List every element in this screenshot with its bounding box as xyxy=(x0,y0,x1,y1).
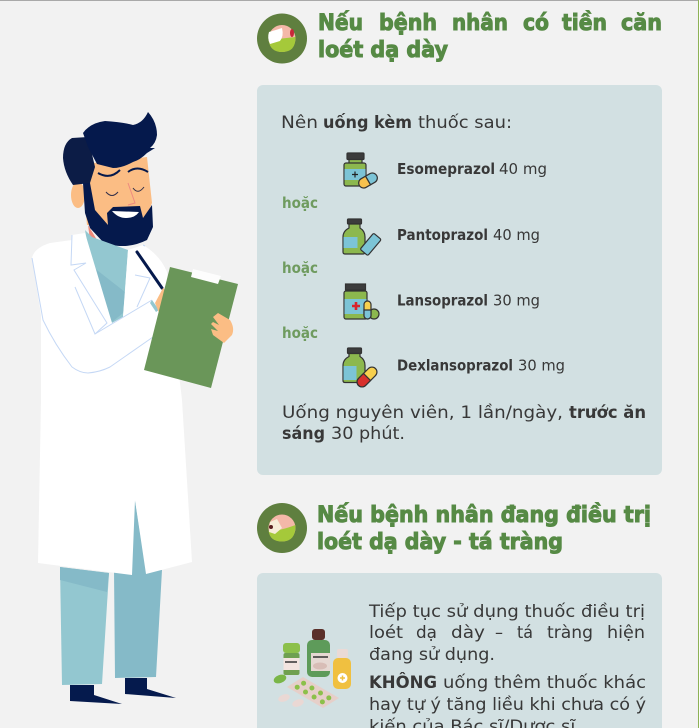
section 1 heading: bệnh xyxy=(379,11,437,36)
section 2 icon: treatment badge xyxy=(257,503,307,553)
illustration: medicine bottles and blister pack xyxy=(273,629,351,708)
drug: lansoprazol: Lansoprazol xyxy=(397,292,488,310)
illustration: doctor writing on clipboard xyxy=(32,112,238,704)
drug: pantoprazol: 40 mg xyxy=(493,226,540,244)
treatment text: hay tự ý tăng liều khi chưa có ý xyxy=(369,695,646,714)
treatment text: đang sử dụng. xyxy=(369,645,495,664)
section 2 heading xyxy=(317,503,651,555)
treatment text: hiện xyxy=(607,623,645,642)
treatment text xyxy=(368,602,646,728)
dosing instruction text: 30 phút. xyxy=(331,424,405,443)
dosing instruction text: Uống nguyên viên, 1 lần/ngày, xyxy=(282,403,563,422)
dosing instruction text: sáng xyxy=(282,424,325,443)
intro text xyxy=(281,113,512,132)
icon: esomeprazol bottle and capsule xyxy=(344,153,379,190)
section 1 heading: căn xyxy=(621,11,662,36)
icon: lansoprazol bottle and pills xyxy=(344,284,379,319)
doctor shirt xyxy=(85,230,128,323)
treatment text: KHÔNG xyxy=(369,673,437,692)
doctor head xyxy=(63,112,157,246)
label: hoặc: hoặc xyxy=(282,259,318,277)
treatment text: Tiếp tục sử dụng thuốc điều trị xyxy=(368,602,645,621)
drug: pantoprazol: Pantoprazol xyxy=(397,226,488,244)
treatment text: tràng xyxy=(547,623,593,642)
drug: dexlansoprazol: 30 mg xyxy=(518,356,565,374)
panel: current treatment xyxy=(257,573,662,728)
section 1 heading: có xyxy=(523,11,549,36)
drug: dexlansoprazol: Dexlansoprazol xyxy=(397,356,513,374)
clipboard xyxy=(144,267,238,388)
section 1 heading: tiền xyxy=(562,11,607,36)
dosing instruction text: trước ăn xyxy=(569,403,646,422)
icon: dexlansoprazol bottle and capsule xyxy=(343,348,379,389)
dosing instruction text xyxy=(282,403,646,443)
treatment text: uống thêm thuốc khác xyxy=(443,673,646,692)
label: hoặc: hoặc xyxy=(282,194,318,212)
treatment text: – xyxy=(495,623,503,642)
section 1 heading: loét dạ dày xyxy=(318,38,448,63)
drug: esomeprazol: Esomeprazol xyxy=(397,160,495,178)
drug: lansoprazol: 30 mg xyxy=(493,292,540,310)
treatment text: dạ xyxy=(416,623,437,642)
treatment text: tá xyxy=(517,623,533,642)
panel: medicines to take xyxy=(257,85,662,475)
label: hoặc: hoặc xyxy=(282,324,318,342)
icon: pantoprazol bottle and blister xyxy=(343,219,381,256)
doctor legs and shoes xyxy=(60,500,176,704)
treatment text: loét xyxy=(369,623,404,642)
section 1 heading xyxy=(318,11,662,63)
pen and hand xyxy=(137,252,172,320)
doctor white coat xyxy=(32,233,192,575)
section 2 heading: loét dạ dày - tá tràng xyxy=(317,530,563,555)
hand on clipboard xyxy=(211,313,233,343)
intro text: uống kèm xyxy=(323,113,412,132)
section 2 heading: Nếu bệnh nhân đang điều trị xyxy=(317,503,651,528)
section 1 icon: stomach badge xyxy=(257,14,307,64)
section 1 heading: Nếu xyxy=(318,11,363,36)
intro text: thuốc sau: xyxy=(418,113,512,132)
drug: esomeprazol: 40 mg xyxy=(499,160,547,178)
treatment text: dày xyxy=(451,623,485,642)
section 1 heading: nhân xyxy=(452,11,508,36)
intro text: Nên xyxy=(281,113,318,132)
